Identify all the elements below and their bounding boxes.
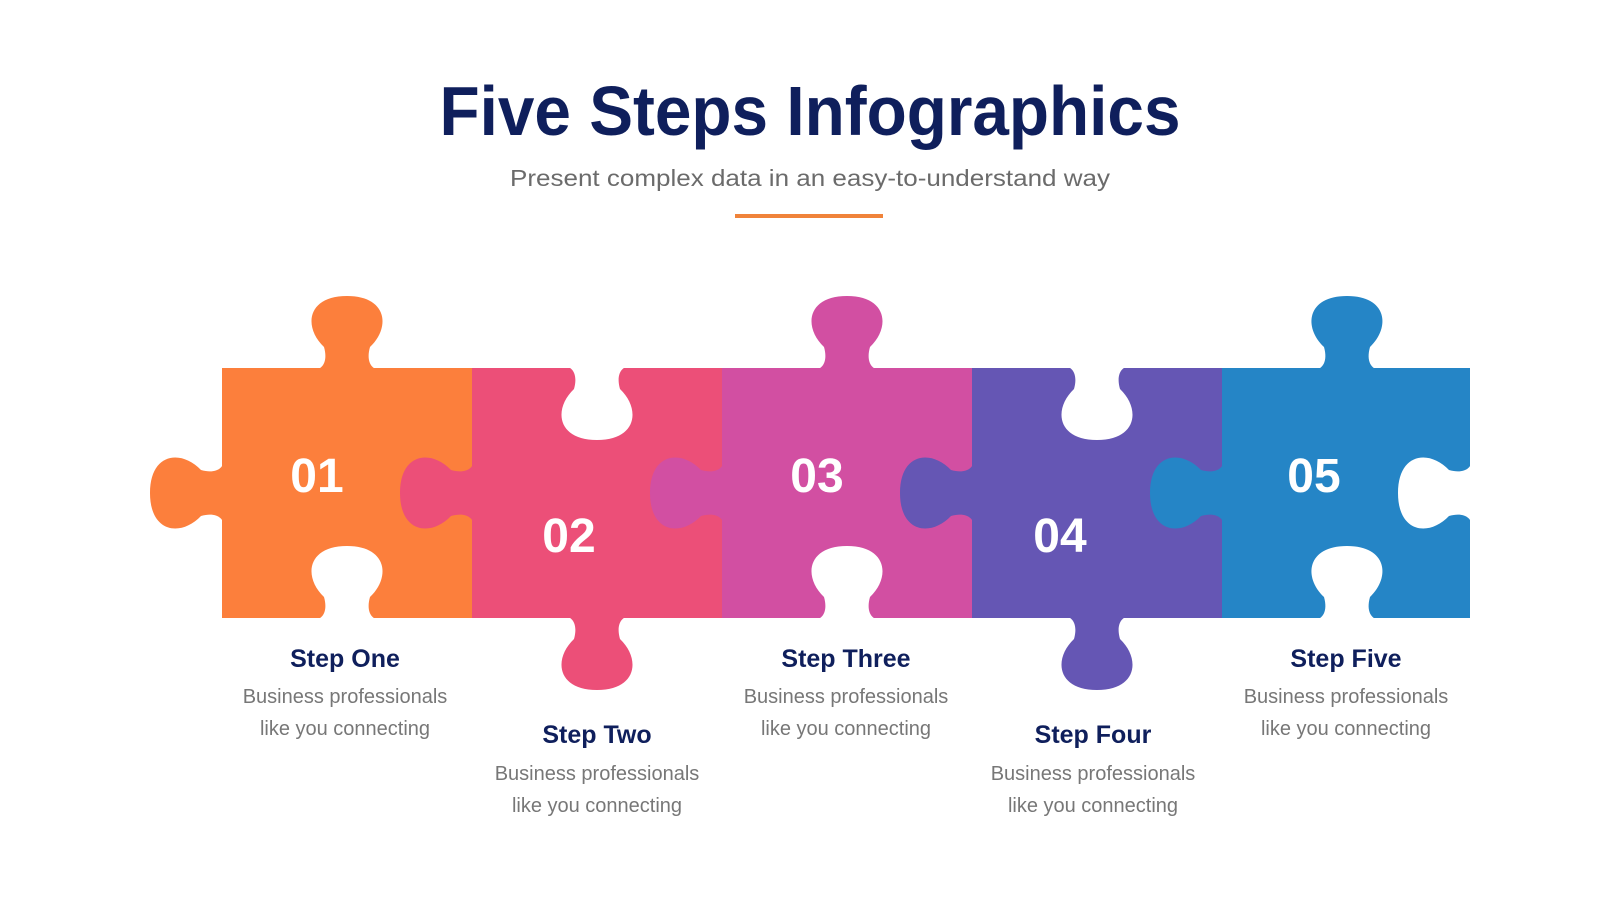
step two text: like you connecting <box>512 795 682 817</box>
subtitle: Present complex data in an easy-to-understand way <box>510 165 1111 191</box>
number 01: 01 <box>290 450 344 503</box>
step five text: like you connecting <box>1261 718 1431 740</box>
step five text <box>1244 645 1448 740</box>
number 04: 04 <box>1033 510 1087 563</box>
step three text: Step Three <box>781 645 911 673</box>
step three text: Business professionals <box>744 686 948 708</box>
number 02: 02 <box>542 510 596 563</box>
step four text: like you connecting <box>1008 795 1178 817</box>
step four text: Step Four <box>1035 721 1152 749</box>
step five text: Business professionals <box>1244 686 1448 708</box>
step one text: Business professionals <box>243 686 447 708</box>
step two text: Step Two <box>542 721 652 749</box>
step one text <box>243 645 447 740</box>
accent underline <box>735 214 883 218</box>
puzzle chain <box>150 296 1472 690</box>
step four text: Business professionals <box>991 763 1195 785</box>
step three text <box>744 645 948 740</box>
step four text <box>991 721 1195 817</box>
number 05: 05 <box>1287 450 1341 503</box>
step two text: Business professionals <box>495 763 699 785</box>
step one text: Step One <box>290 645 400 673</box>
number 03: 03 <box>790 450 844 503</box>
step five text: Step Five <box>1290 645 1402 673</box>
step one text: like you connecting <box>260 718 430 740</box>
title: Five Steps Infographics <box>440 72 1180 150</box>
step three text: like you connecting <box>761 718 931 740</box>
step two text <box>495 721 699 817</box>
